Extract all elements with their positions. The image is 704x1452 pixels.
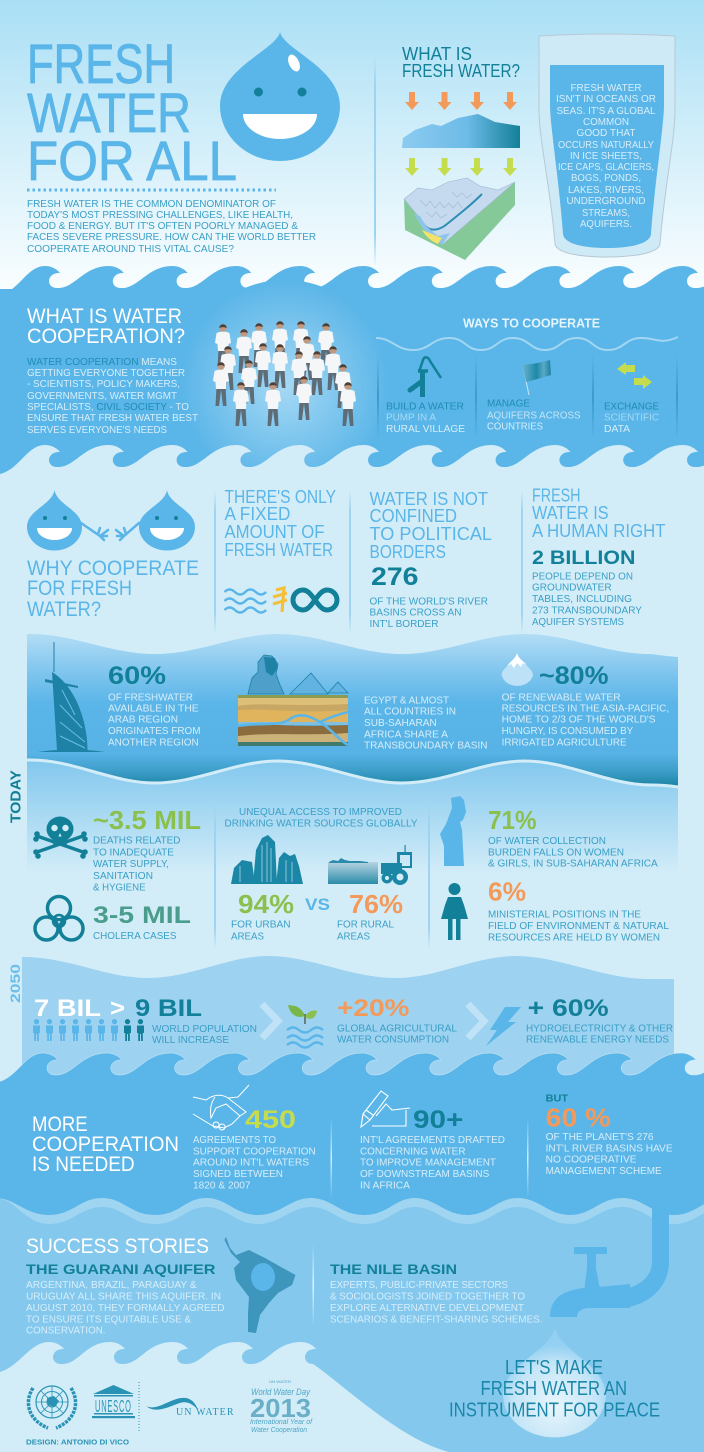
text: egypt transboundary basin: ALL COUNTRIES IN [364, 706, 456, 718]
stat: but 60 percent: 60 % [546, 1103, 611, 1133]
stat: 94 vs 76: FOR URBAN [231, 919, 290, 931]
stat: but 60 percent: OF THE PLANET'S 276 [546, 1131, 654, 1143]
icon: chevrons [262, 1004, 484, 1038]
icon: field and tractor [328, 845, 412, 885]
text: political borders stat: OF THE WORLD'S RIVER [370, 596, 488, 608]
stat: 450 agreements: SUPPORT COOPERATION [193, 1145, 316, 1157]
label: today: TODAY [8, 770, 24, 823]
panel: more cooperation background [0, 1083, 704, 1215]
stat: 90+ agreements: IN AFRICA [360, 1179, 410, 1191]
stat: population [33, 995, 257, 1046]
dividers: why columns [214, 490, 523, 634]
dotted logo divider [138, 1382, 140, 1432]
text: unequal access heading: UNEQUAL ACCESS TO IMPROVED [239, 806, 402, 818]
icon: skull and crossbones [33, 816, 88, 859]
stat: deaths: SANITATION [93, 870, 153, 882]
icon: south america map [224, 1237, 296, 1333]
text: human right stat: 2 BILLION [532, 548, 636, 569]
text block: intro paragraph: TODAY'S MOST PRESSING CHALLENGES, LIKE HEALTH, [27, 209, 293, 221]
icon: smiling water drop mascot [220, 32, 340, 161]
story: guarani aquifer: AUGUST 2010, THEY FORMALLY AGREED [26, 1302, 225, 1314]
stat: 60 percent arab region [108, 662, 200, 748]
story: guarani aquifer: URUGUAY ALL SHARE THIS AQUIFER. IN [26, 1291, 221, 1303]
logo: unesco temple: UNESCO [95, 1396, 131, 1416]
icon: mountain [402, 114, 520, 148]
text: glass definition: BOGS, PONDS, [571, 172, 641, 184]
text: glass definition: AQUIFERS. [580, 218, 632, 230]
heading: ways to cooperate: WAYS TO COOPERATE [463, 316, 600, 330]
logo: world water day 2013 [250, 1379, 313, 1434]
text: human right stat: PEOPLE DEPEND ON [532, 570, 633, 582]
illustration: sphinx, pyramids, aquifer layers [238, 655, 348, 746]
stat: 450 agreements: AGREEMENTS TO [193, 1134, 276, 1146]
heading: more cooperation is needed [32, 1113, 179, 1176]
wavy line under ways heading [376, 337, 678, 350]
stat: 60 percent arab region: 60% [108, 662, 166, 690]
text: exchange data: SCIENTIFIC [604, 412, 659, 424]
stat: 80 percent asia-pacific: OF RENEWABLE WATER [502, 691, 621, 703]
stat: population: WORLD POPULATION [152, 1023, 257, 1035]
text: glass definition [556, 82, 656, 230]
panel: water cooperation background [0, 289, 704, 485]
icon: exchange arrows [617, 362, 652, 389]
text: manage aquifers [487, 398, 580, 432]
text: manage aquifers: COUNTRIES [487, 420, 543, 432]
panel: why cooperate background [0, 480, 704, 1100]
vertical divider top [374, 55, 376, 267]
dashed divider under title [27, 188, 276, 192]
text: glass definition: ISN'T IN OCEANS OR [556, 93, 656, 105]
text block: intro paragraph: FACES SEVERE PRESSURE. HOW CAN THE WORLD BETTER [27, 231, 316, 243]
stat: 6 percent: RESOURCES ARE HELD BY WOMEN [488, 931, 660, 943]
stat: but 60 percent [546, 1093, 673, 1177]
text: political borders stat [370, 489, 492, 630]
text block: cooperation definition [27, 356, 199, 436]
text: fixed amount heading: A FIXED [224, 504, 290, 524]
stat: but 60 percent: MANAGEMENT SCHEME [546, 1165, 662, 1177]
heading: success stories: SUCCESS STORIES [26, 1235, 209, 1258]
heading: more cooperation is needed: COOPERATION [32, 1133, 179, 1156]
stat: 60 percent arab region: ANOTHER REGION [108, 736, 199, 748]
icon: lightning bolt [486, 1007, 521, 1046]
story: nile basin: SCENARIOS & BENEFIT-SHARING SCHEMES. [330, 1313, 542, 1325]
stat: population: 9 BIL [135, 995, 202, 1022]
stat: agriculture +20: GLOBAL AGRICULTURAL [337, 1022, 457, 1034]
wave stripe of today band [27, 760, 678, 787]
heading: What is fresh water [402, 44, 520, 81]
story: nile basin [330, 1261, 542, 1325]
title: Fresh Water For All: FOR ALL [27, 129, 237, 192]
dividers: today columns [214, 800, 430, 950]
logo: unesco temple [92, 1385, 135, 1418]
stat: 450 agreements: SIGNED BETWEEN [193, 1168, 283, 1180]
stat: 6 percent: 6% [488, 877, 526, 907]
logo: world water day 2013: World Water Day [251, 1387, 310, 1397]
stat: energy +60 [526, 995, 673, 1046]
stat: but 60 percent: BUT [546, 1093, 569, 1105]
wave band: blue over 2050 [0, 1053, 704, 1123]
stat: 450 agreements [193, 1106, 316, 1191]
text: political borders stat: BASINS CROSS AN [370, 607, 462, 619]
text: exchange data: DATA [604, 423, 630, 435]
stat: population: WILL INCREASE [152, 1034, 229, 1046]
stat: 90+ agreements: OF DOWNSTREAM BASINS [360, 1168, 489, 1180]
text block: cooperation definition: GETTING EVERYONE TOGETHER [27, 367, 185, 379]
text: unequal access heading: DRINKING WATER SOURCES GLOBALLY [224, 817, 418, 829]
dividers: more cooperation columns [330, 1117, 528, 1199]
story: nile basin: & SOCIOLOGISTS JOINED TOGETHER TO [330, 1291, 525, 1303]
title: Fresh Water For All [27, 32, 237, 192]
stat: energy +60: HYDROELECTRICITY & OTHER [526, 1022, 673, 1034]
text: build a water pump: RURAL VILLAGE [386, 423, 465, 435]
stat: 90+ agreements: 90+ [413, 1106, 463, 1134]
heading: What is fresh water: FRESH WATER? [402, 61, 520, 81]
stat: 90+ agreements: INT'L AGREEMENTS DRAFTED [360, 1134, 505, 1146]
stat: population: > [110, 995, 125, 1022]
icon: two drops shaking hands [27, 490, 195, 550]
stat: 80 percent asia-pacific: HUNGRY, IS CONSUMED BY [502, 725, 633, 737]
stat: population: 7 BIL [34, 995, 101, 1022]
icon: green arrows [405, 158, 517, 176]
text: fixed amount heading: THERE'S ONLY [224, 487, 336, 507]
illustration: group of people [213, 321, 356, 426]
logo: world water day 2013: 2013 [250, 1393, 311, 1423]
stat: agriculture +20: WATER CONSUMPTION [337, 1034, 449, 1046]
text: human right stat: GROUNDWATER [532, 582, 612, 594]
text: glass definition: LAKES, RIVERS, [568, 184, 644, 196]
text: glass definition: SEAS. IT'S A GLOBAL [556, 105, 656, 117]
story: guarani aquifer [26, 1261, 225, 1337]
logo: united nations emblem [28, 1386, 76, 1428]
heading: why cooperate: WATER? [27, 598, 101, 621]
wave band: bottom left logos panel [0, 1342, 449, 1452]
icon: woman carrying water [440, 796, 466, 866]
story: guarani aquifer: THE GUARANI AQUIFER [26, 1261, 216, 1277]
text: political borders stat: 276 [371, 563, 418, 591]
stat: 60 percent arab region: AVAILABLE IN THE [108, 702, 199, 714]
sine layer: light wave [0, 1100, 704, 1224]
text: egypt transboundary basin: AFRICA SHARE A [364, 728, 448, 740]
logo: world water day 2013: UN WATER [269, 1379, 291, 1384]
label: 2050: 2050 [7, 964, 23, 1003]
drop with call to action [449, 1327, 660, 1437]
text: build a water pump: BUILD A WATER [386, 400, 464, 412]
background: top section [0, 0, 704, 295]
stat: agriculture +20: +20% [337, 995, 410, 1022]
text: human right stat: AQUIFER SYSTEMS [532, 616, 624, 628]
text block: intro paragraph: FOOD & ENERGY. BUT IT'S OFTEN POORLY MANAGED & [27, 220, 298, 232]
icon: river valley terrain block [404, 178, 515, 260]
icon: water pump [410, 357, 441, 397]
stat: 71 percent: 71% [488, 805, 537, 835]
text: egypt transboundary basin: SUB-SAHARAN [364, 717, 437, 729]
icon: handshake outline [193, 1085, 249, 1130]
stat: 450 agreements: 1820 & 2007 [193, 1179, 251, 1191]
text: human right stat: 273 TRANSBOUNDARY [532, 605, 642, 617]
logo: un water [146, 1398, 234, 1418]
text block: intro paragraph [27, 198, 316, 255]
heading: What is water cooperation [27, 305, 185, 348]
stat: 450 agreements: AROUND INT'L WATERS [193, 1157, 309, 1169]
heading: why cooperate [27, 557, 199, 621]
stat: deaths: ~3.5 MIL [93, 805, 201, 835]
stat: 90+ agreements: CONCERNING WATER [360, 1145, 466, 1157]
text block: intro paragraph: COOPERATE AROUND THIS VITAL CAUSE? [27, 243, 234, 255]
panel: today upper wave band [27, 634, 678, 786]
story: nile basin: THE NILE BASIN [330, 1261, 457, 1277]
text: glass definition: FRESH WATER [570, 82, 642, 94]
text: manage aquifers: AQUIFERS ACROSS [487, 410, 580, 422]
stat: 6 percent: MINISTERIAL POSITIONS IN THE [488, 908, 641, 920]
text: exchange data: EXCHANGE [604, 400, 659, 412]
text: manage aquifers: MANAGE [487, 398, 530, 410]
stat: 90+ agreements: TO IMPROVE MANAGEMENT [360, 1157, 497, 1169]
text: political borders stat: INT'L BORDER [370, 618, 439, 630]
text: glass definition: IN ICE SHEETS, [570, 150, 642, 162]
icon: sprout over water [287, 1005, 323, 1048]
text: political borders stat: BORDERS [370, 542, 446, 562]
text block: cooperation definition: SPECIALISTS, CIVIL SOCIETY - TO [27, 401, 189, 413]
text block: cooperation definition: - SCIENTISTS, POLICY MAKERS, [27, 378, 180, 390]
stat: 94 vs 76: 76% [349, 889, 403, 919]
text: build a water pump [386, 400, 465, 435]
heading: why cooperate: FOR FRESH [27, 577, 132, 600]
text: egypt transboundary basin [364, 694, 488, 752]
icon: city skyline [231, 835, 303, 884]
stat: 94 vs 76: FOR RURAL [337, 919, 394, 931]
panel: today lower gradient [27, 759, 678, 880]
text: exchange data [604, 400, 659, 435]
text block: intro paragraph: FRESH WATER IS THE COMMON DENOMINATOR OF [27, 198, 276, 210]
icon: woman figure [441, 883, 468, 940]
text: human right stat: WATER IS [532, 503, 608, 523]
stat: but 60 percent: INT'L RIVER BASINS HAVE [546, 1142, 673, 1154]
stat: 450 agreements: 450 [245, 1106, 296, 1134]
text block: cooperation definition: GOVERNMENTS, WATER MGMT [27, 390, 178, 402]
text: fixed amount heading [224, 487, 336, 560]
text block: cooperation definition: ENSURE THAT FRESH WATER BEST [27, 412, 199, 424]
dividers: ways columns [377, 355, 678, 439]
text: glass definition: UNDERGROUND [566, 195, 646, 207]
divider: stories [312, 1243, 314, 1327]
story: guarani aquifer: ARGENTINA, BRAZIL, PARAGUAY & [26, 1279, 197, 1291]
icon: flag [522, 360, 551, 395]
icon: burj al arab tower [38, 642, 105, 752]
background: success stories [0, 1190, 704, 1452]
logo: world water day 2013: Water Cooperation [251, 1425, 307, 1434]
icon row: people [33, 1019, 144, 1041]
text: call to action: INSTRUMENT FOR PEACE [449, 1400, 660, 1422]
stat: 94 vs 76: VS [305, 895, 330, 914]
stat: 80 percent asia-pacific: ~80% [539, 662, 608, 690]
icon: water not equal infinity [224, 588, 337, 612]
stat: cholera: CHOLERA CASES [93, 930, 176, 942]
stat: 80 percent asia-pacific [502, 662, 669, 748]
text: glass definition: GOOD THAT [576, 127, 636, 139]
stat: cholera [93, 902, 191, 942]
credit: designer: DESIGN: ANTONIO DI VICO [26, 1438, 129, 1446]
stat: energy +60: RENEWABLE ENERGY NEEDS [526, 1034, 669, 1046]
stat: cholera: 3-5 MIL [93, 902, 191, 929]
text: glass definition: ICE CAPS, GLACIERS, [558, 161, 654, 173]
stat: deaths: TO INADEQUATE [93, 846, 174, 858]
heading: What is water cooperation: WHAT IS WATER [27, 305, 182, 328]
heading: why cooperate: WHY COOPERATE [27, 557, 199, 580]
stat: deaths [93, 805, 201, 894]
stat: deaths: & HYGIENE [93, 882, 146, 894]
story: guarani aquifer: TO ENSURE ITS EQUITABLE USE & [26, 1313, 191, 1325]
stat: 94 vs 76: AREAS [231, 930, 264, 942]
stat: energy +60: + 60% [528, 995, 609, 1022]
text: human right stat: A HUMAN RIGHT [532, 521, 666, 541]
stat: 60 percent arab region: OF FRESHWATER [108, 691, 193, 703]
title: Fresh Water For All: WATER [27, 81, 191, 144]
heading: more cooperation is needed: IS NEEDED [32, 1153, 135, 1176]
text: call to action: FRESH WATER AN [480, 1378, 627, 1400]
text: glass definition: STREAMS, [582, 207, 630, 219]
text: human right stat: TABLES, INCLUDING [532, 593, 632, 605]
glow behind people [180, 280, 390, 490]
stat: agriculture +20 [337, 995, 457, 1046]
stat: 80 percent asia-pacific: IRRIGATED AGRICULTURE [502, 736, 627, 748]
stat: but 60 percent: NO COOPERATIVE [546, 1154, 637, 1166]
text: political borders stat: CONFINED [370, 506, 457, 526]
stat: 6 percent [488, 877, 669, 943]
text: glass definition: OCCURS NATURALLY [558, 139, 654, 151]
stat: deaths: DEATHS RELATED [93, 834, 181, 846]
heading: more cooperation is needed: MORE [32, 1113, 88, 1136]
stat: 6 percent: FIELD OF ENVIRONMENT & NATURAL [488, 920, 669, 932]
logo: world water day 2013: International Year of [250, 1417, 313, 1426]
story: guarani aquifer: CONSERVATION. [26, 1325, 106, 1337]
stat: 60 percent arab region: ARAB REGION [108, 714, 178, 726]
wave band: top [0, 266, 704, 336]
logo: un water: UN WATER [176, 1407, 234, 1418]
text block: cooperation definition: SERVES EVERYONE'S NEEDS [27, 424, 167, 436]
stat: 71 percent: & GIRLS, IN SUB-SAHARAN AFRICA [488, 857, 658, 869]
text: human right stat [532, 486, 666, 628]
stat: 60 percent arab region: ORIGINATES FROM [108, 725, 200, 737]
stat: 94 vs 76 [231, 889, 403, 942]
heading: What is fresh water: WHAT IS [402, 44, 472, 64]
stat: 80 percent asia-pacific: HOME TO 2/3 OF THE WORLD'S [502, 714, 656, 726]
text block: cooperation definition: WATER COOPERATION MEANS [27, 356, 177, 368]
text: human right stat: FRESH [532, 486, 580, 506]
stat: 94 vs 76: 94% [238, 889, 294, 919]
stat: 71 percent [488, 805, 658, 869]
text: political borders stat: TO POLITICAL [370, 524, 492, 544]
icon: small snowy drop [502, 653, 533, 686]
stat: 90+ agreements [360, 1106, 505, 1191]
title: Fresh Water For All: FRESH [27, 32, 175, 95]
text: call to action [449, 1357, 660, 1422]
wave band: light transition [0, 445, 704, 515]
text: fixed amount heading: FRESH WATER [224, 540, 333, 560]
stat: 71 percent: OF WATER COLLECTION [488, 835, 606, 847]
panel: 2050 band [22, 956, 674, 1090]
text: unequal access heading [224, 806, 418, 829]
icon: hand writing with pen [361, 1091, 410, 1127]
story: nile basin: EXPERTS, PUBLIC-PRIVATE SECTORS [330, 1279, 508, 1291]
text: build a water pump: PUMP IN A [386, 412, 436, 424]
icon: orange arrows [405, 92, 517, 110]
heading: What is water cooperation: COOPERATION? [27, 325, 185, 348]
glass of water with definition [539, 34, 675, 257]
icon: biohazard [35, 896, 83, 940]
text: fixed amount heading: AMOUNT OF [224, 522, 324, 542]
stat: 71 percent: BURDEN FALLS ON WOMEN [488, 846, 624, 858]
text: call to action: LET'S MAKE [505, 1357, 603, 1379]
stat: deaths: WATER SUPPLY, [93, 858, 169, 870]
story: nile basin: EXPLORE ALTERNATIVE DEVELOPMENT [330, 1302, 525, 1314]
stat: 94 vs 76: AREAS [337, 930, 370, 942]
text: glass definition: COMMON [583, 116, 629, 128]
text: political borders stat: WATER IS NOT [370, 489, 488, 509]
stat: 80 percent asia-pacific: RESOURCES IN THE ASIA-PACIFIC, [502, 702, 669, 714]
text: egypt transboundary basin: EGYPT & ALMOST [364, 694, 450, 706]
text: egypt transboundary basin: TRANSBOUNDARY BASIN [364, 740, 488, 752]
icon: tap and pipe [550, 1205, 669, 1317]
